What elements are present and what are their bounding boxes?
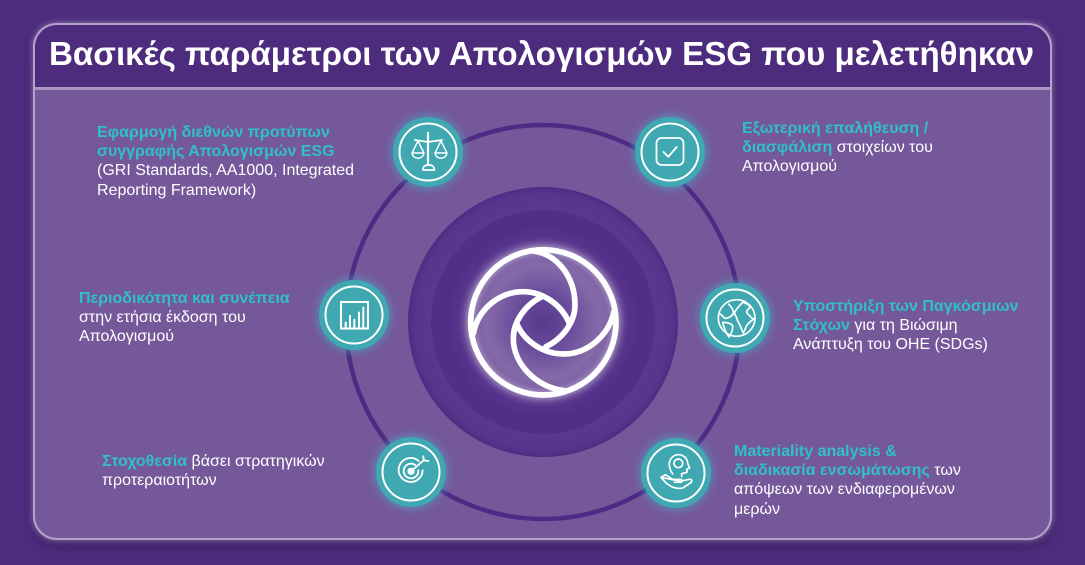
text block: international standards: συγγραφής Απολογισμών ESG xyxy=(97,143,335,160)
text block: SDGs xyxy=(793,298,1018,353)
text block: international standards: Reporting Framework) xyxy=(97,182,256,199)
text block: periodicity: στην ετήσια έκδοση του xyxy=(79,309,246,326)
text block: SDGs: Υποστήριξη των Παγκόσμιων xyxy=(793,298,1018,315)
text block: periodicity: Περιοδικότητα και συνέπεια xyxy=(79,290,290,307)
icon: target with arrow xyxy=(373,434,449,510)
icon: bar chart xyxy=(316,277,392,353)
text block: materiality: Materiality analysis & xyxy=(734,443,897,460)
text block: periodicity: Απολογισμού xyxy=(79,328,174,345)
text block: external assurance: Εξωτερική επαλήθευση / xyxy=(742,120,928,137)
text block: SDGs: Στόχων για τη Βιώσιμη xyxy=(793,317,958,334)
text block: materiality: απόψεων των ενδιαφερομένων xyxy=(734,481,955,498)
outer ring xyxy=(346,125,740,519)
icon: scales xyxy=(390,114,466,190)
text block: international standards: (GRI Standards, AA1000, Integrated xyxy=(97,162,354,179)
text block: periodicity xyxy=(79,290,290,345)
text block: international standards: Εφαρμογή διεθνών προτύπων xyxy=(97,124,330,141)
central disc xyxy=(408,187,678,457)
title banner xyxy=(35,25,1050,90)
text block: SDGs: Ανάπτυξη του ΟΗΕ (SDGs) xyxy=(793,336,988,353)
text block: external assurance xyxy=(742,120,933,175)
icon: central swirl logo xyxy=(471,250,616,395)
text block: materiality: διαδικασία ενσωμάτωσης των xyxy=(734,462,961,479)
text block: goal setting xyxy=(102,453,325,489)
icon: head and hand xyxy=(638,435,714,511)
text block: goal setting: Στοχοθεσία βάσει στρατηγικών xyxy=(102,453,325,470)
text block: external assurance: διασφάλιση στοιχείων του xyxy=(742,139,933,156)
title: Βασικές παράμετροι των Απολογισμών ESG που μελετήθηκαν xyxy=(49,36,1034,73)
text block: international standards xyxy=(97,124,354,199)
text block: external assurance: Απολογισμού xyxy=(742,158,837,175)
icon: globe xyxy=(697,280,773,356)
text block: goal setting: προτεραιοτήτων xyxy=(102,472,217,489)
icon: checkbox xyxy=(632,114,708,190)
text block: materiality: μερών xyxy=(734,501,780,518)
text block: materiality xyxy=(734,443,961,518)
